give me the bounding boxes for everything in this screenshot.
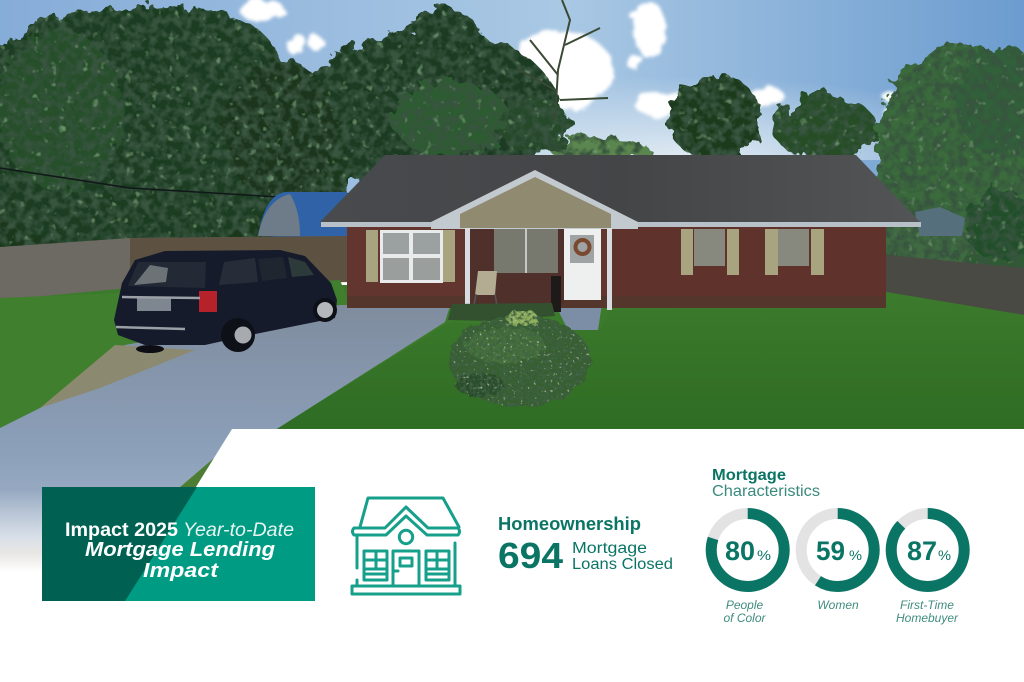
title text: Impact [143,560,220,582]
house [320,155,921,312]
power line [0,168,280,197]
shrub [449,310,591,407]
donut: people of color 80%: People [726,598,764,612]
donut: women 59%: Women [817,598,859,612]
bare branches [520,0,608,120]
donut: first-time homebuyer 87%: First-Time [900,598,954,612]
donut: women 59%: % [849,547,862,563]
mortgage characteristics heading [712,467,820,500]
title text: Impact 2025 [65,520,178,541]
roof [320,155,920,222]
homeownership stat [498,514,673,576]
donut: first-time homebuyer 87% [891,514,964,625]
window with shutters [366,230,455,283]
loans closed caption: Mortgage [572,540,647,557]
donut: people of color 80%: of Color [723,611,767,625]
chair [474,271,497,306]
donut: first-time homebuyer 87%: Homebuyer [896,611,959,625]
loans closed caption [572,540,673,573]
van [114,250,337,353]
posts [465,228,612,310]
donut: women 59% [801,514,874,612]
title text: Year-to-Date [183,520,294,541]
loans closed number: 694 [498,535,563,576]
eaves [321,222,921,227]
homeownership heading: Homeownership [498,514,641,534]
sky [0,0,1024,250]
donut: people of color 80% [711,514,784,625]
white content panel [0,429,1024,682]
fade to white [0,490,240,572]
porch window [470,229,564,304]
title text: Mortgage Lending [85,539,275,561]
title banner [42,487,315,601]
clouds [240,0,918,119]
driveway [0,305,450,601]
mortgage characteristics heading: Mortgage [712,467,786,484]
banner green field [42,487,315,601]
donut: women 59%: 59 [816,536,845,566]
donut: people of color 80%: % [757,547,771,563]
small house behind fence [915,207,965,236]
icon: house [352,498,460,594]
grass base [0,285,1024,432]
brick wall [347,226,886,308]
blue shed [258,192,347,238]
title text [65,520,294,582]
donut: first-time homebuyer 87%: 87 [907,536,937,566]
banner dark overlay [42,487,197,601]
walkway [555,304,602,330]
railing [551,276,561,312]
dirt patch [40,345,195,408]
porch gable [431,170,638,229]
right fence [886,255,1024,315]
mortgage characteristics heading: Characteristics [712,483,820,500]
left fence [0,236,350,300]
right lawn [270,292,1024,432]
planting bed [448,303,555,321]
door [564,229,601,300]
trees [0,5,1024,285]
loans closed caption: Loans Closed [572,556,673,573]
left lawn [0,280,350,428]
wreath [576,240,590,254]
right windows [681,229,824,275]
donut: first-time homebuyer 87%: % [938,547,951,563]
grass sliver by driveway [148,458,214,570]
donut: people of color 80%: 80 [725,536,755,566]
